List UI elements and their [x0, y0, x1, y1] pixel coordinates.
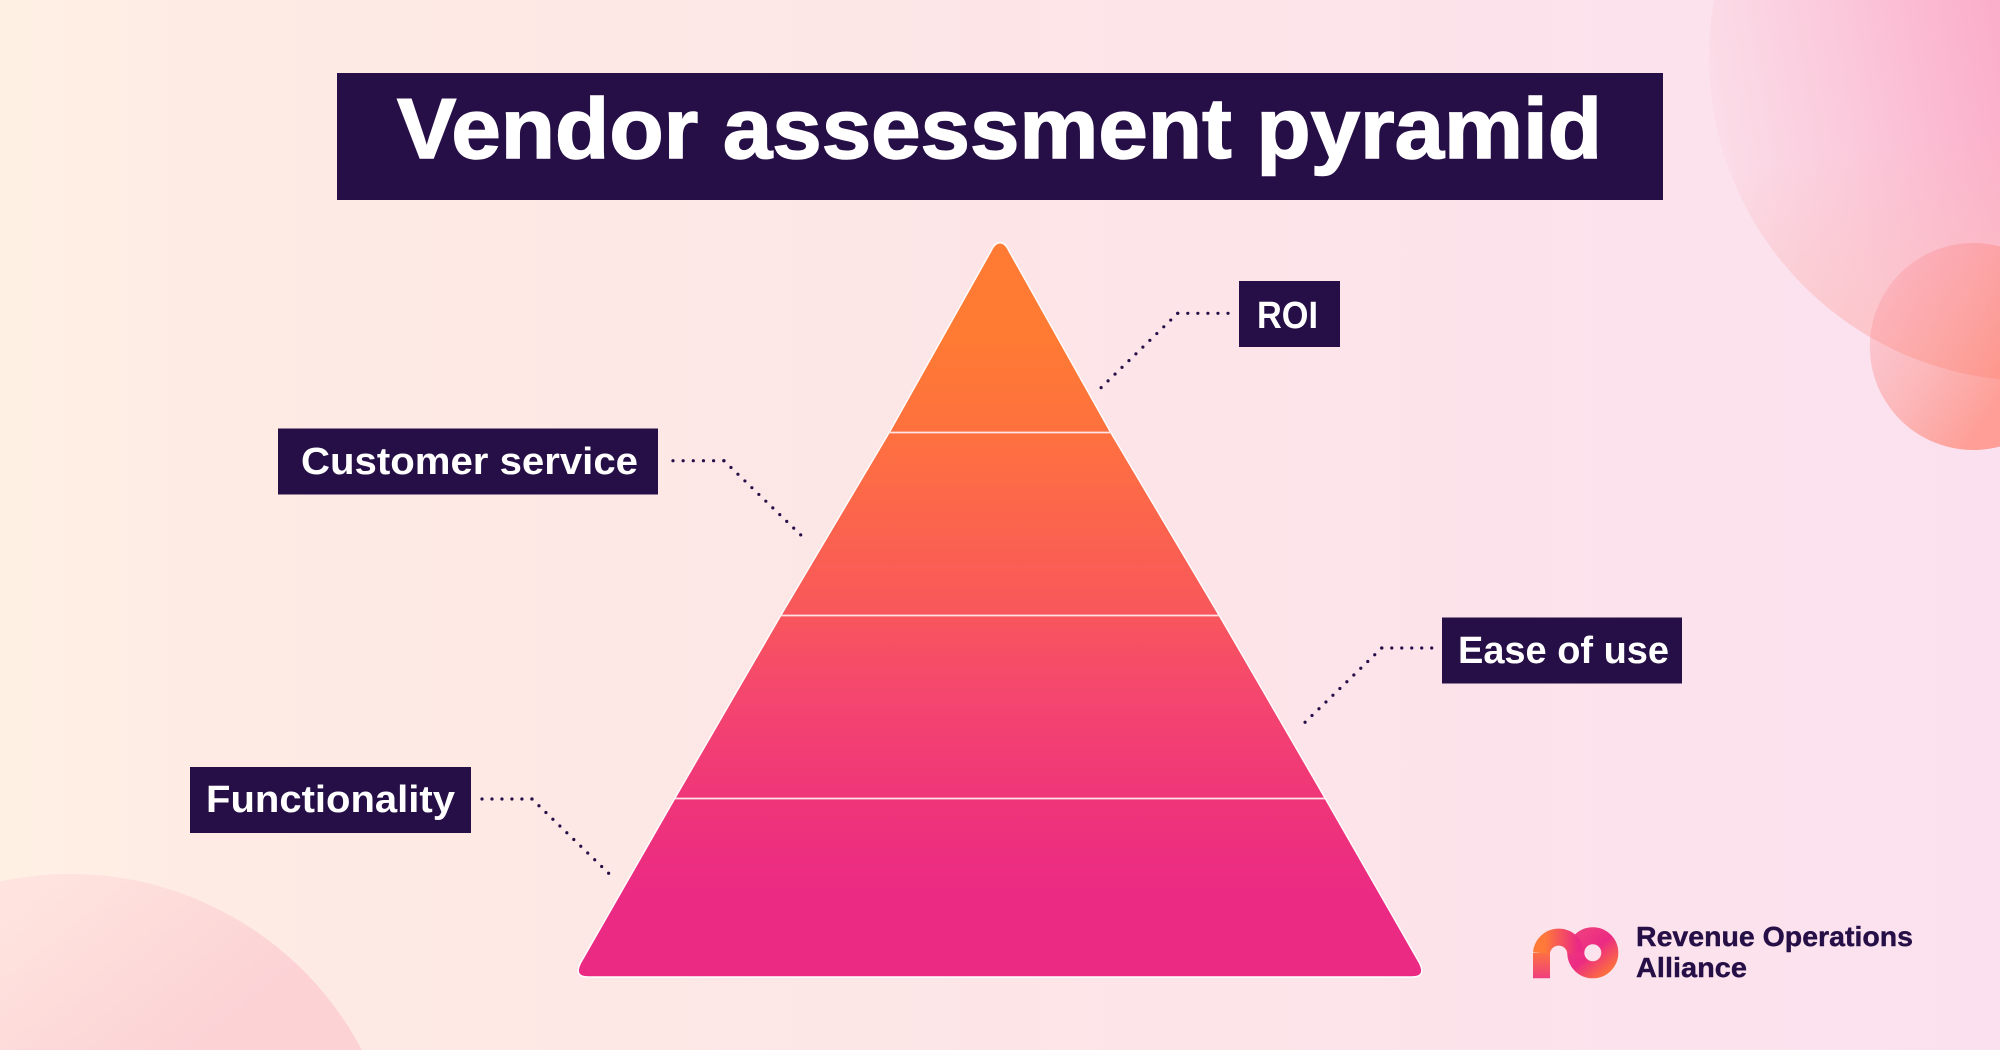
decorative circles: top right [1709, 0, 2000, 450]
label: Ease of use [1442, 618, 1682, 684]
logo wordmark: Alliance [1636, 952, 1747, 983]
title [337, 73, 1663, 200]
logo wordmark: Revenue Operations [1636, 921, 1913, 952]
label: Customer service [278, 428, 658, 494]
label: ROI: ROI [1257, 295, 1318, 337]
title: Vendor assessment pyramid [397, 82, 1602, 177]
decorative circle: bottom left [0, 874, 362, 1050]
pyramid body with four tiers [578, 243, 1422, 977]
tier divider lines [675, 432, 1325, 798]
leader line: ROI [1101, 313, 1228, 388]
label: Functionality: Functionality [206, 779, 455, 821]
label: Customer service: Customer service [301, 441, 638, 483]
pyramid chart [578, 243, 1422, 977]
logo: Revenue Operations Alliance [1542, 921, 1913, 983]
leader line: Ease of use [1305, 648, 1432, 722]
leader line: Functionality [482, 799, 609, 873]
label: Ease of use: Ease of use [1458, 630, 1669, 672]
leader line: Customer service [673, 461, 801, 535]
label: ROI [1239, 281, 1340, 347]
logo wordmark [1636, 921, 1913, 983]
icon: logo mark [1542, 936, 1610, 978]
label: Functionality [190, 767, 471, 833]
